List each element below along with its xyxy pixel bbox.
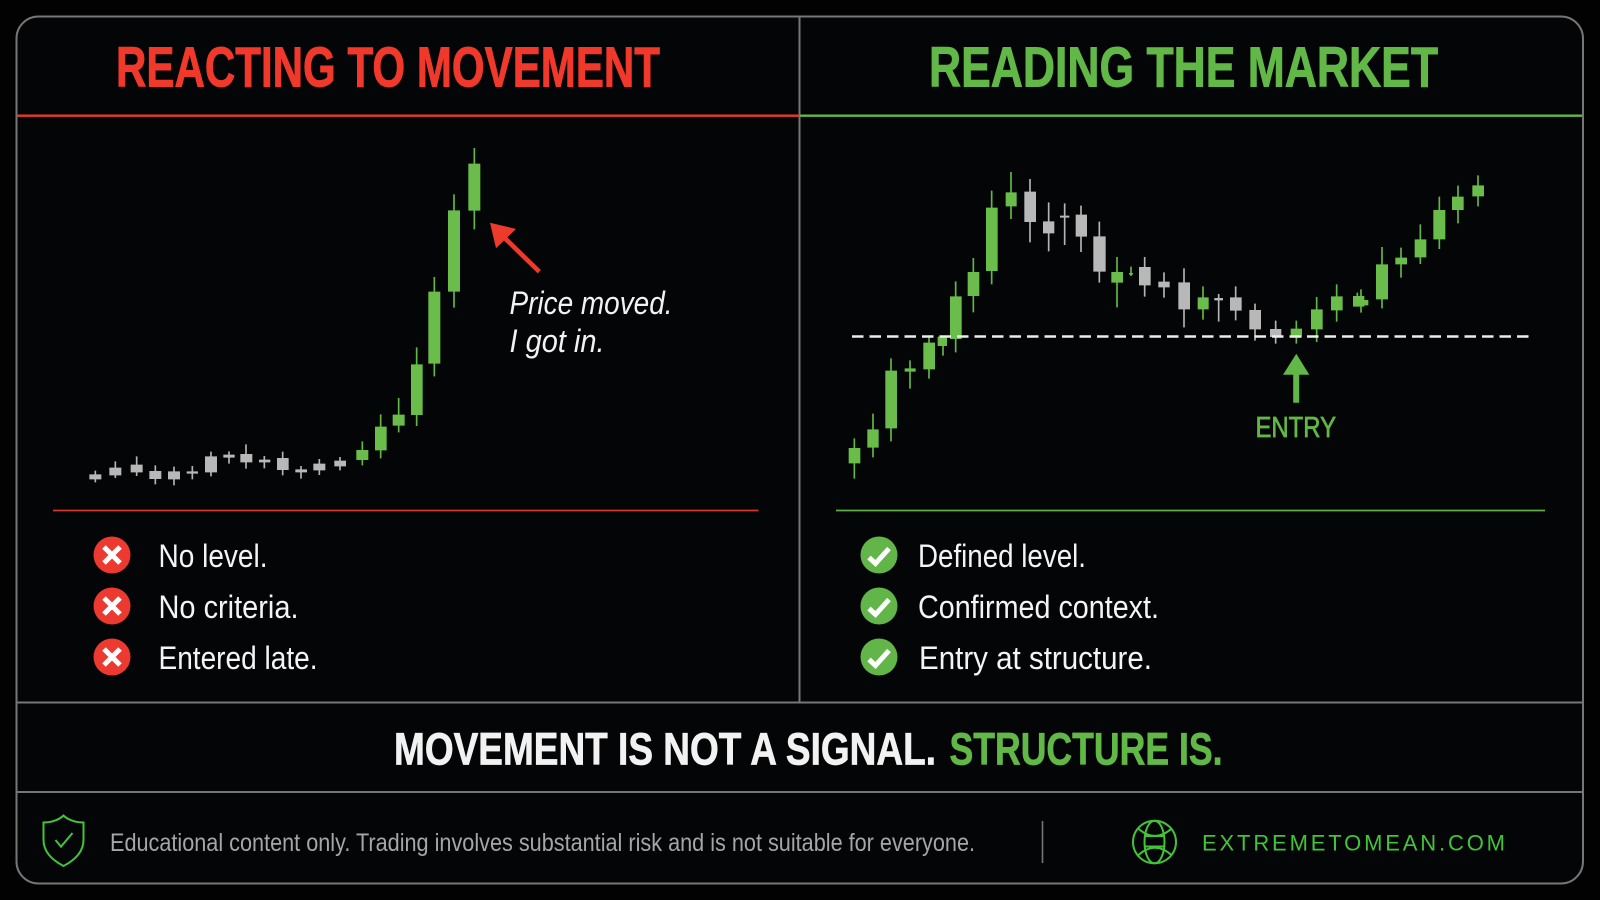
dashed support level [852, 335, 1529, 338]
disclaimer: Educational content only. Trading involves substantial risk and is not suitable for everyone. [110, 829, 975, 857]
text: failure items: Entered late. [158, 640, 318, 676]
panel: reacting to movement [89, 36, 673, 676]
icon: green check [860, 536, 898, 574]
text: failure items: No criteria. [158, 589, 298, 625]
icon: green check [860, 638, 898, 676]
arrow: red pointer to last candle [490, 223, 539, 272]
candlestick chart: left half [849, 172, 1170, 479]
list: failures [94, 536, 318, 676]
label: entry: ENTRY [1256, 412, 1336, 444]
icon: green check [860, 588, 898, 624]
footer separator [1042, 821, 1044, 863]
icon: shield [44, 816, 84, 866]
website: EXTREMETOMEAN.COM [1202, 830, 1505, 856]
icon: red cross [94, 588, 130, 624]
candlestick chart: late breakout [89, 148, 480, 485]
headline: movement is not a signal: STRUCTURE IS. [950, 724, 1222, 774]
icon: red cross [94, 536, 130, 574]
callout: price moved: I got in. [510, 323, 604, 359]
candlestick chart: right half [1178, 175, 1484, 344]
panel: reading the market [849, 36, 1529, 676]
footer [44, 816, 1505, 866]
green candles [849, 172, 1133, 479]
icon: red cross [94, 638, 130, 676]
list: confirmations [860, 536, 1159, 676]
heading: reacting to movement: REACTING TO MOVEMENT [116, 36, 660, 100]
grey candles [1024, 179, 1170, 298]
text: confirmation items: Confirmed context. [918, 589, 1159, 625]
text: confirmation items [918, 538, 1159, 676]
callout: price moved: Price moved. [510, 285, 672, 321]
icon: globe [1133, 821, 1176, 863]
green candles [1198, 175, 1484, 344]
callout: price moved [510, 285, 672, 359]
heading: reading the market: READING THE MARKET [929, 36, 1438, 100]
flat grey candles [89, 444, 346, 485]
arrow: entry up arrow [1283, 354, 1309, 403]
text: confirmation items: Defined level. [918, 538, 1086, 574]
text: failure items: No level. [158, 538, 268, 574]
text: failure items [158, 538, 318, 676]
grey candles [1178, 268, 1281, 344]
rising green candles [356, 148, 480, 465]
headline: movement is not a signal: MOVEMENT IS NOT A SIGNAL. [394, 724, 936, 774]
text: confirmation items: Entry at structure. [919, 640, 1152, 676]
